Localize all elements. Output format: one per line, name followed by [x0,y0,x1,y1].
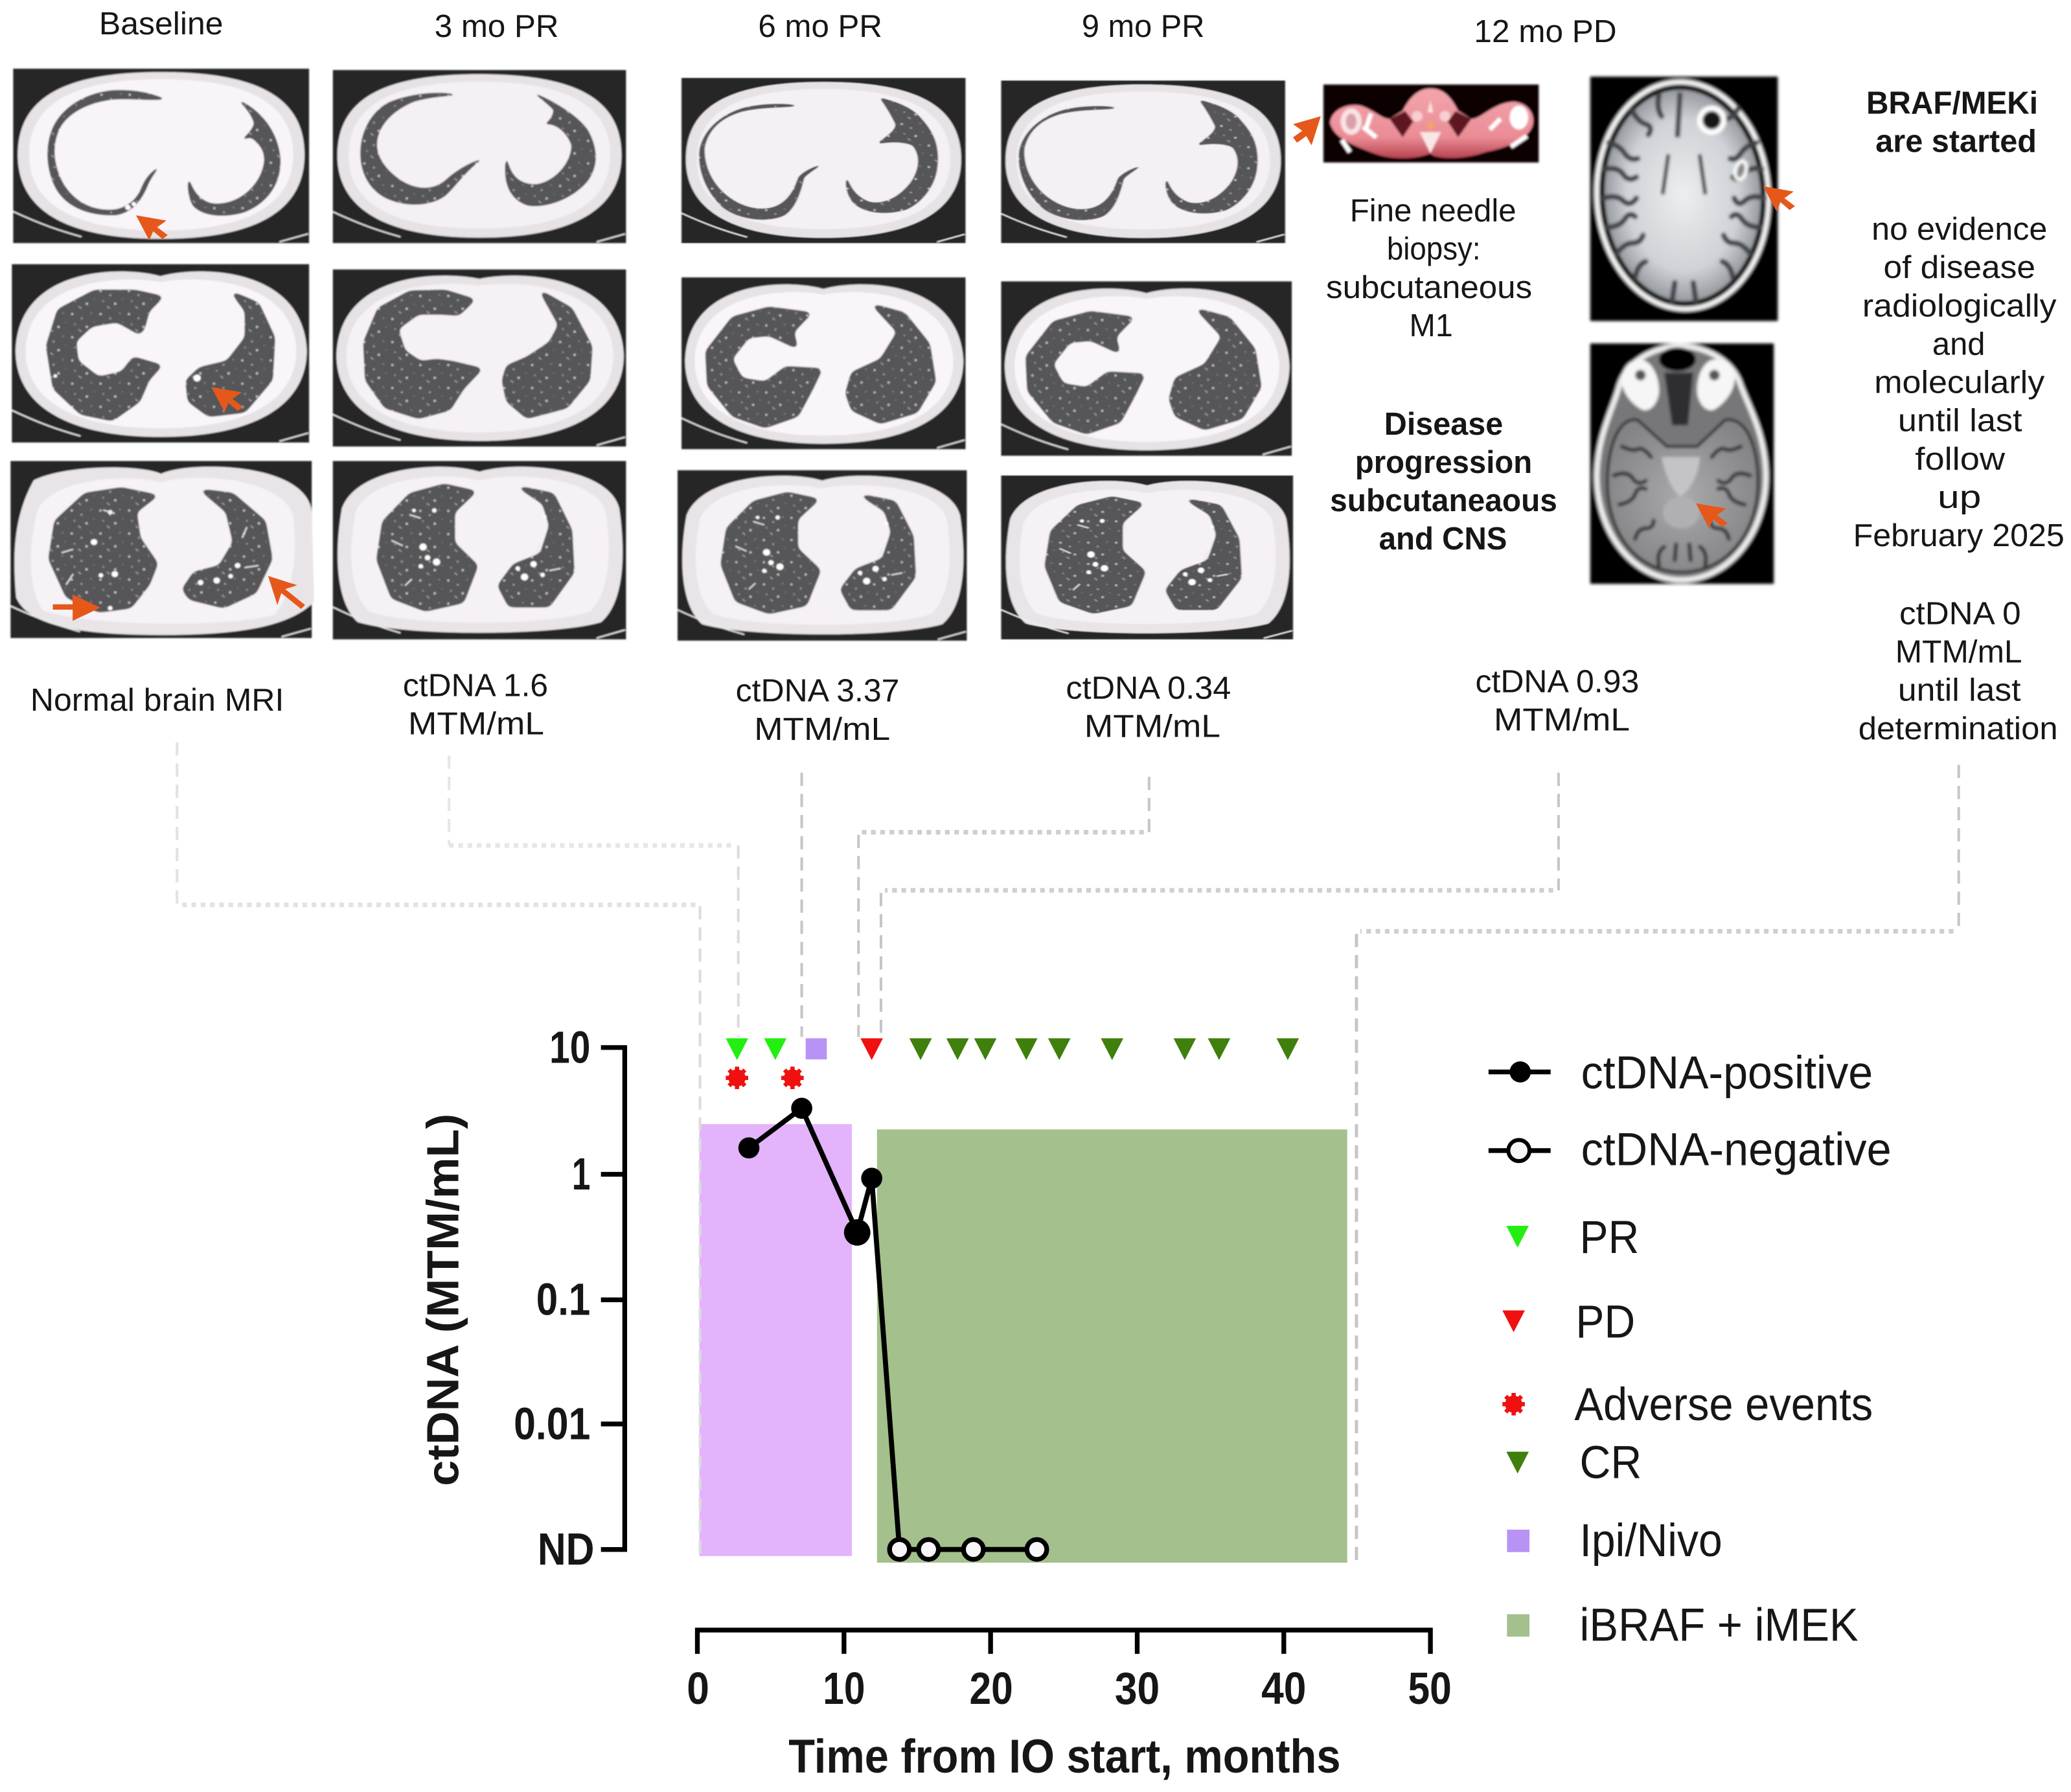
text: ctDNA 0 until last determination [1859,596,2058,746]
text: disease progression [1330,407,1557,557]
text: ctDNA 3.37 [736,674,899,747]
chart: x axis labels: 0 [687,1663,709,1714]
image: brain MRI with lesions [1590,76,1778,321]
chart: y axis labels: 0.01 [514,1398,590,1449]
column headings: 12 mo PD [1474,14,1617,49]
column headings: Baseline [99,6,223,41]
text: fine needle biopsy [1326,194,1532,343]
text: BRAF/MEKi started: BRAF/MEKi [1866,86,2038,121]
text: no evidence of disease: of disease [1883,250,2035,285]
text: BRAF/MEKi started: are started [1875,124,2037,159]
icon: arrow on lower MRI [1696,503,1728,529]
text: ctDNA 1.6: MTM/mL [408,707,544,742]
chart: x axis labels: 40 [1261,1663,1306,1714]
text: disease progression: progression [1355,445,1532,480]
chart: x axis title: Time from IO start, months [788,1730,1340,1783]
legend: PD [1502,1296,1635,1348]
chart: y axis labels: 0.1 [536,1274,590,1325]
chart: y axis [601,1048,624,1550]
chart: treatment band iBRAF + iMEK [877,1129,1347,1563]
column headings [99,6,1617,49]
legend: Ipi/Nivo: Ipi/Nivo [1580,1515,1722,1567]
text: no evidence of disease: no evidence [1871,212,2047,247]
text: ctDNA 0.34: ctDNA 0.34 [1066,671,1231,706]
text: ctDNA 0 until last determination: determination [1859,711,2058,746]
text: ctDNA 1.6: ctDNA 1.6 [403,669,548,704]
legend: PR: PR [1580,1212,1639,1263]
text: ctDNA 0 until last determination: MTM/mL [1895,635,2022,670]
chart: x axis labels: 20 [970,1663,1013,1714]
text: ctDNA 0.93: ctDNA 0.93 [1475,664,1639,699]
chart: adverse event markers [726,1066,804,1089]
text: disease progression: Disease [1384,407,1503,442]
text: no evidence of disease: and [1932,327,1985,362]
text: ctDNA 0.34 [1066,671,1231,744]
legend: iBRAF + iMEK: iBRAF + iMEK [1580,1599,1859,1651]
legend [1489,1047,1892,1651]
panel: CT scans, 6 months [678,78,967,641]
text: no evidence of disease: radiologically [1862,288,2057,323]
icon: arrow on upper MRI [1763,186,1795,211]
chart: x axis labels: 50 [1408,1663,1452,1714]
chart: ctDNA line and points [738,1097,1047,1559]
chart: x axis [698,1630,1430,1654]
legend: PD: PD [1575,1296,1635,1348]
icon: left-pointing arrow on baseline CT row 3 [268,576,305,609]
chart: y axis title: ctDNA (MTM/mL) [417,1114,468,1486]
column headings: 9 mo PR [1082,9,1204,44]
legend: adverse events: Adverse events [1574,1379,1873,1430]
icon: arrow pointing to PET lesion [1293,116,1321,145]
legend: CR [1506,1437,1642,1489]
text: normal brain MRI: Normal brain MRI [30,683,284,718]
text: disease progression: and CNS [1379,522,1507,557]
chart: CR markers [910,1039,1299,1060]
text: fine needle biopsy: biopsy: [1387,232,1481,267]
text: no evidence of disease: follow [1915,442,2006,477]
chart: PR markers [726,1039,786,1060]
legend: CR: CR [1580,1437,1642,1489]
chart: treatment band Ipi/Nivo [700,1124,852,1556]
image: brain MRI axial lower slice [1590,343,1774,584]
text: ctDNA 0 until last determination: until last [1898,673,2021,708]
icon: arrow on baseline CT row 1 [136,215,168,240]
column headings: 6 mo PR [758,9,882,44]
text: no evidence of disease: up [1938,480,1981,515]
text: ctDNA 0.34: MTM/mL [1084,709,1220,744]
panel: CT scans, 3 months [333,70,626,639]
column headings: 3 mo PR [435,9,558,44]
text: ctDNA 0.93 [1475,664,1639,738]
connector lines from timepoints to chart [177,742,1959,1563]
text: fine needle biopsy: Fine needle [1350,194,1516,229]
text: BRAF/MEKi started [1866,86,2038,159]
chart: x axis labels [687,1663,1452,1714]
text: disease progression: subcutaneaous [1330,483,1557,518]
text: no evidence of disease: molecularly [1874,365,2045,400]
chart: PD marker [860,1039,883,1060]
chart: x axis labels: 10 [823,1663,865,1714]
chart: y axis labels: 1 [572,1149,590,1199]
legend: ctDNA-negative: ctDNA-negative [1581,1123,1892,1175]
text: ctDNA 3.37: ctDNA 3.37 [736,674,899,709]
text: fine needle biopsy: M1 [1410,308,1453,343]
icon: right arrow on baseline CT row 3 [53,595,100,621]
text: ctDNA 0.93: MTM/mL [1494,703,1630,738]
chart: Ipi/Nivo marker [806,1039,827,1059]
text: no evidence of disease [1853,212,2065,553]
panel: CT scans, baseline [10,69,314,638]
legend: ctDNA-positive: ctDNA-positive [1581,1047,1873,1099]
chart: y axis labels: ND [538,1524,595,1574]
text: no evidence of disease: February 2025 [1853,518,2065,553]
chart: y axis labels [514,1022,595,1574]
text: ctDNA 0 until last determination: ctDNA 0 [1899,596,2021,631]
image: PET scan subcutaneous lesion [1323,85,1539,163]
chart: y axis labels: 10 [549,1022,590,1072]
text: no evidence of disease: until last [1898,404,2022,439]
icon: arrow on baseline CT row 2 [211,387,243,412]
text: ctDNA 3.37: MTM/mL [754,712,890,747]
panel: CT scans, 9 months [1001,80,1293,639]
chart: x axis labels: 30 [1115,1663,1160,1714]
text: fine needle biopsy: subcutaneous [1326,270,1532,305]
text: ctDNA 1.6 [403,669,548,742]
legend: PR [1506,1212,1639,1263]
legend: Ipi/Nivo [1507,1515,1722,1567]
